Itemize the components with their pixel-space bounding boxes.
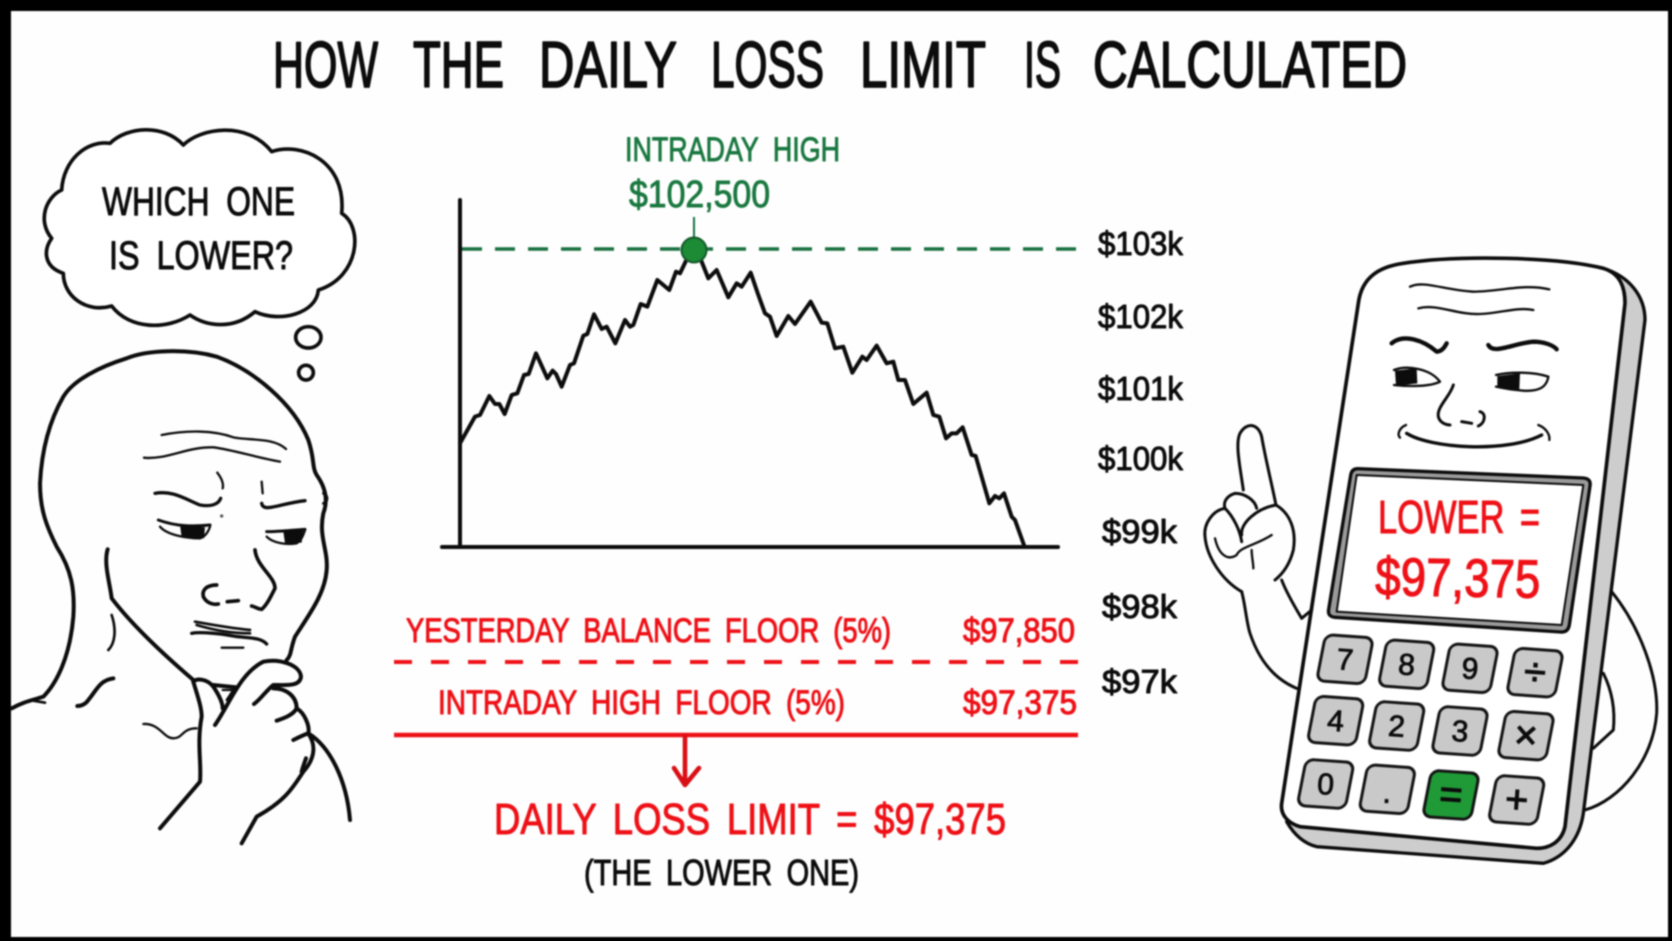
key 3 (1432, 706, 1488, 756)
title: LIMIT (860, 28, 986, 101)
key divide (1507, 648, 1563, 697)
price axis labels: $100k (1098, 440, 1183, 477)
key 4: 4 (1326, 704, 1345, 739)
key 0: 0 (1316, 768, 1335, 802)
title: THE (413, 28, 504, 101)
key decimal: . (1382, 776, 1392, 810)
intraday high dashed line (462, 247, 1079, 251)
price axis labels: $98k (1102, 588, 1178, 625)
key 4 (1307, 696, 1364, 745)
pointing hand (1205, 426, 1312, 688)
key 8: 8 (1397, 648, 1416, 682)
intraday high label: $102,500 (629, 174, 770, 216)
title: DAILY (539, 28, 677, 101)
calculator character (1205, 258, 1657, 863)
price axis labels: $102k (1098, 298, 1183, 335)
price axis labels: $101k (1098, 370, 1183, 407)
price line (460, 243, 1024, 546)
key 0 (1297, 759, 1354, 809)
yesterday balance floor row: YESTERDAY BALANCE FLOOR (5%) (406, 612, 891, 650)
key multiply: × (1513, 713, 1539, 758)
key plus (1488, 775, 1545, 825)
key 3: 3 (1450, 715, 1469, 749)
screen bezel (1328, 469, 1590, 632)
price axis labels (1098, 225, 1183, 700)
screen text (1375, 491, 1541, 610)
title: HOW (273, 28, 378, 101)
line chart (442, 131, 1183, 700)
key 2 (1368, 701, 1425, 751)
bubble text: WHICH ONE (102, 180, 295, 224)
title: IS (1024, 28, 1061, 101)
thought bubble (44, 130, 355, 380)
price axis labels: $99k (1102, 513, 1178, 550)
keypad (1297, 635, 1563, 825)
yesterday balance floor row: $97,850 (963, 612, 1075, 650)
calculator body (1205, 258, 1657, 863)
title: LOSS (711, 28, 824, 101)
chart axes (442, 200, 1058, 547)
key 7 (1317, 635, 1373, 684)
the lower one note: (THE LOWER ONE) (584, 852, 859, 893)
daily loss limit result: DAILY LOSS LIMIT = $97,375 (494, 795, 1006, 844)
title: CALCULATED (1093, 28, 1407, 101)
key 2: 2 (1387, 710, 1406, 744)
calculator face (1392, 284, 1557, 447)
key divide: ÷ (1523, 650, 1547, 695)
price axis labels: $103k (1098, 225, 1183, 262)
screen text: $97,375 (1375, 547, 1541, 610)
screen text: LOWER = (1378, 491, 1540, 543)
intraday high label (625, 131, 840, 216)
key plus: + (1504, 777, 1530, 822)
price axis labels: $97k (1102, 663, 1178, 700)
key multiply (1498, 711, 1554, 760)
thought bubble: IS LOWER? (109, 234, 293, 278)
intraday high marker (682, 217, 706, 262)
key 8 (1378, 640, 1435, 689)
key 9: 9 (1460, 652, 1479, 686)
title (273, 28, 1407, 101)
intraday high floor row: $97,375 (963, 684, 1077, 722)
key equals: = (1438, 772, 1464, 817)
arrow down (674, 736, 699, 785)
key equals (1423, 770, 1479, 820)
key decimal (1359, 765, 1416, 814)
cloud outline (44, 130, 355, 380)
intraday high floor row: INTRADAY HIGH FLOOR (5%) (438, 684, 845, 722)
thinking character (12, 351, 350, 843)
intraday high label: INTRADAY HIGH (625, 131, 840, 169)
key 9 (1442, 644, 1498, 693)
floor calculation (394, 612, 1078, 893)
key 7: 7 (1335, 643, 1354, 677)
